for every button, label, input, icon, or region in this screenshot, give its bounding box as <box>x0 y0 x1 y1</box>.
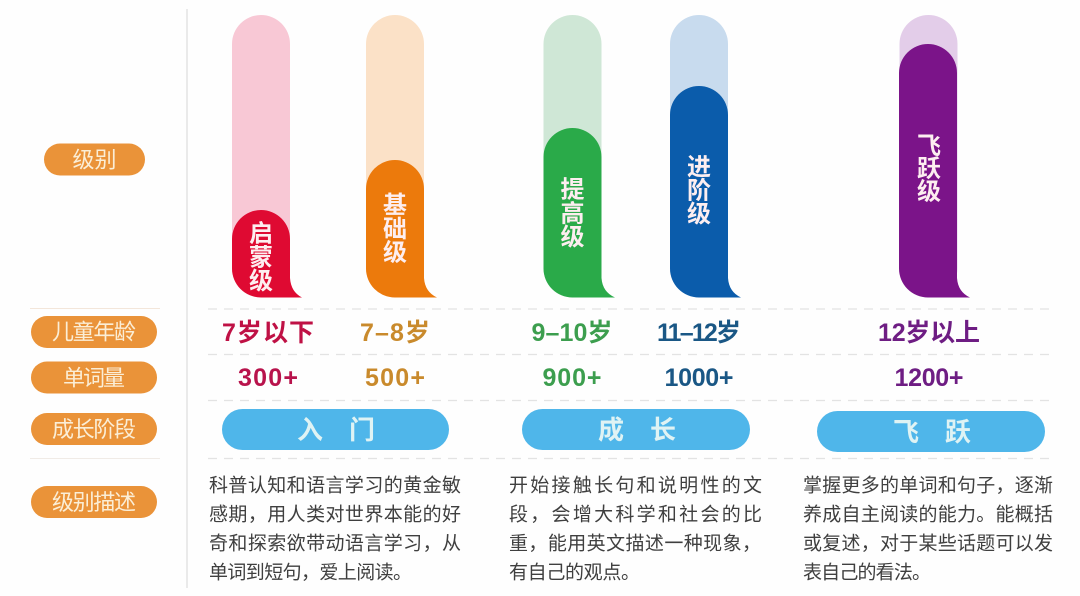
bar: 飞跃级: 飞 <box>917 133 941 160</box>
row label: 单词量: 单词量 <box>63 366 125 390</box>
description: 启蒙级: 感期，用人类对世界本能的好 <box>209 504 461 526</box>
description: 飞跃: 表自己的看法。 <box>803 562 931 584</box>
description: 启蒙级: 单词到短句，爱上阅读。 <box>209 562 412 584</box>
row label: 儿童年龄: 儿童年龄 <box>52 320 136 344</box>
word count row: 500+ <box>365 364 425 392</box>
bar: 进阶级: 级 <box>687 201 711 228</box>
description: 成长 <box>509 474 762 584</box>
description: 启蒙级: 奇和探索欲带动语言学习，从 <box>209 532 461 554</box>
bar: 基础级: 级 <box>383 240 407 266</box>
bar: 飞跃级: 跃 <box>917 156 941 182</box>
description: 成长: 开始接触长句和说明性的文 <box>509 474 762 496</box>
bar: 提高级: 提 <box>560 176 584 204</box>
bar: 飞跃级 <box>899 15 970 298</box>
description: 飞跃: 养成自主阅读的能力。能概括 <box>803 504 1053 526</box>
bar: 启蒙级 <box>232 15 302 298</box>
ages row: 7岁以下 <box>222 319 314 347</box>
bar: 启蒙级: 蒙 <box>249 244 273 272</box>
stage: 入门 <box>222 409 449 450</box>
word count row: 1000+ <box>664 364 734 392</box>
row label: 级别描述: 级别描述 <box>52 490 136 515</box>
description: 启蒙级: 科普认知和语言学习的黄金敏 <box>209 474 461 496</box>
stage: 入门: 入 门 <box>297 415 375 445</box>
description: 成长: 有自己的观点。 <box>509 562 640 584</box>
ages row: 11–12岁 <box>657 319 741 347</box>
ages row: 9–10岁 <box>532 319 612 347</box>
description: 启蒙级 <box>209 474 461 584</box>
stage: 飞跃: 飞 跃 <box>893 417 971 447</box>
bar: 提高级: 级 <box>560 224 584 251</box>
row label: 级别描述 <box>31 486 157 518</box>
row label: 成长阶段: 成长阶段 <box>52 417 136 442</box>
ages row: 12岁以上 <box>878 319 980 347</box>
description: 飞跃: 掌握更多的单词和句子，逐渐 <box>803 474 1053 496</box>
bar: 基础级: 基 <box>383 192 407 219</box>
row label: 儿童年龄 <box>31 316 157 348</box>
ages row <box>222 319 980 347</box>
row label: 级别 <box>44 144 145 176</box>
stage: 成长 <box>522 409 750 450</box>
bar: 进阶级: 进 <box>687 154 711 181</box>
description: 成长: 重，能用英文描述一种现象， <box>509 532 761 554</box>
bar: 启蒙级: 启 <box>249 220 273 248</box>
description: 飞跃 <box>803 474 1053 584</box>
word count row: 900+ <box>542 364 602 392</box>
bar: 启蒙级: 级 <box>249 268 273 295</box>
word count row: 300+ <box>238 364 298 392</box>
bar: 提高级 <box>544 15 615 298</box>
bar: 基础级: 础 <box>383 216 407 243</box>
bar: 进阶级: 阶 <box>687 178 711 204</box>
bar: 进阶级 <box>670 15 741 298</box>
ages row: 7–8岁 <box>360 319 430 347</box>
bar: 飞跃级: 级 <box>917 178 941 206</box>
word count row: 1200+ <box>894 364 964 392</box>
row label: 单词量 <box>31 362 157 394</box>
bar: 提高级: 高 <box>560 200 584 228</box>
stage: 成长: 成 长 <box>598 415 676 445</box>
row label: 成长阶段 <box>31 413 157 445</box>
row label: 级别: 级别 <box>72 148 117 172</box>
word count row <box>238 364 964 392</box>
description: 飞跃: 或复述，对于某些话题可以发 <box>803 532 1053 554</box>
description: 成长: 段，会增大科学和社会的比 <box>509 504 762 526</box>
bar: 基础级 <box>366 15 437 298</box>
stage: 飞跃 <box>817 411 1045 452</box>
